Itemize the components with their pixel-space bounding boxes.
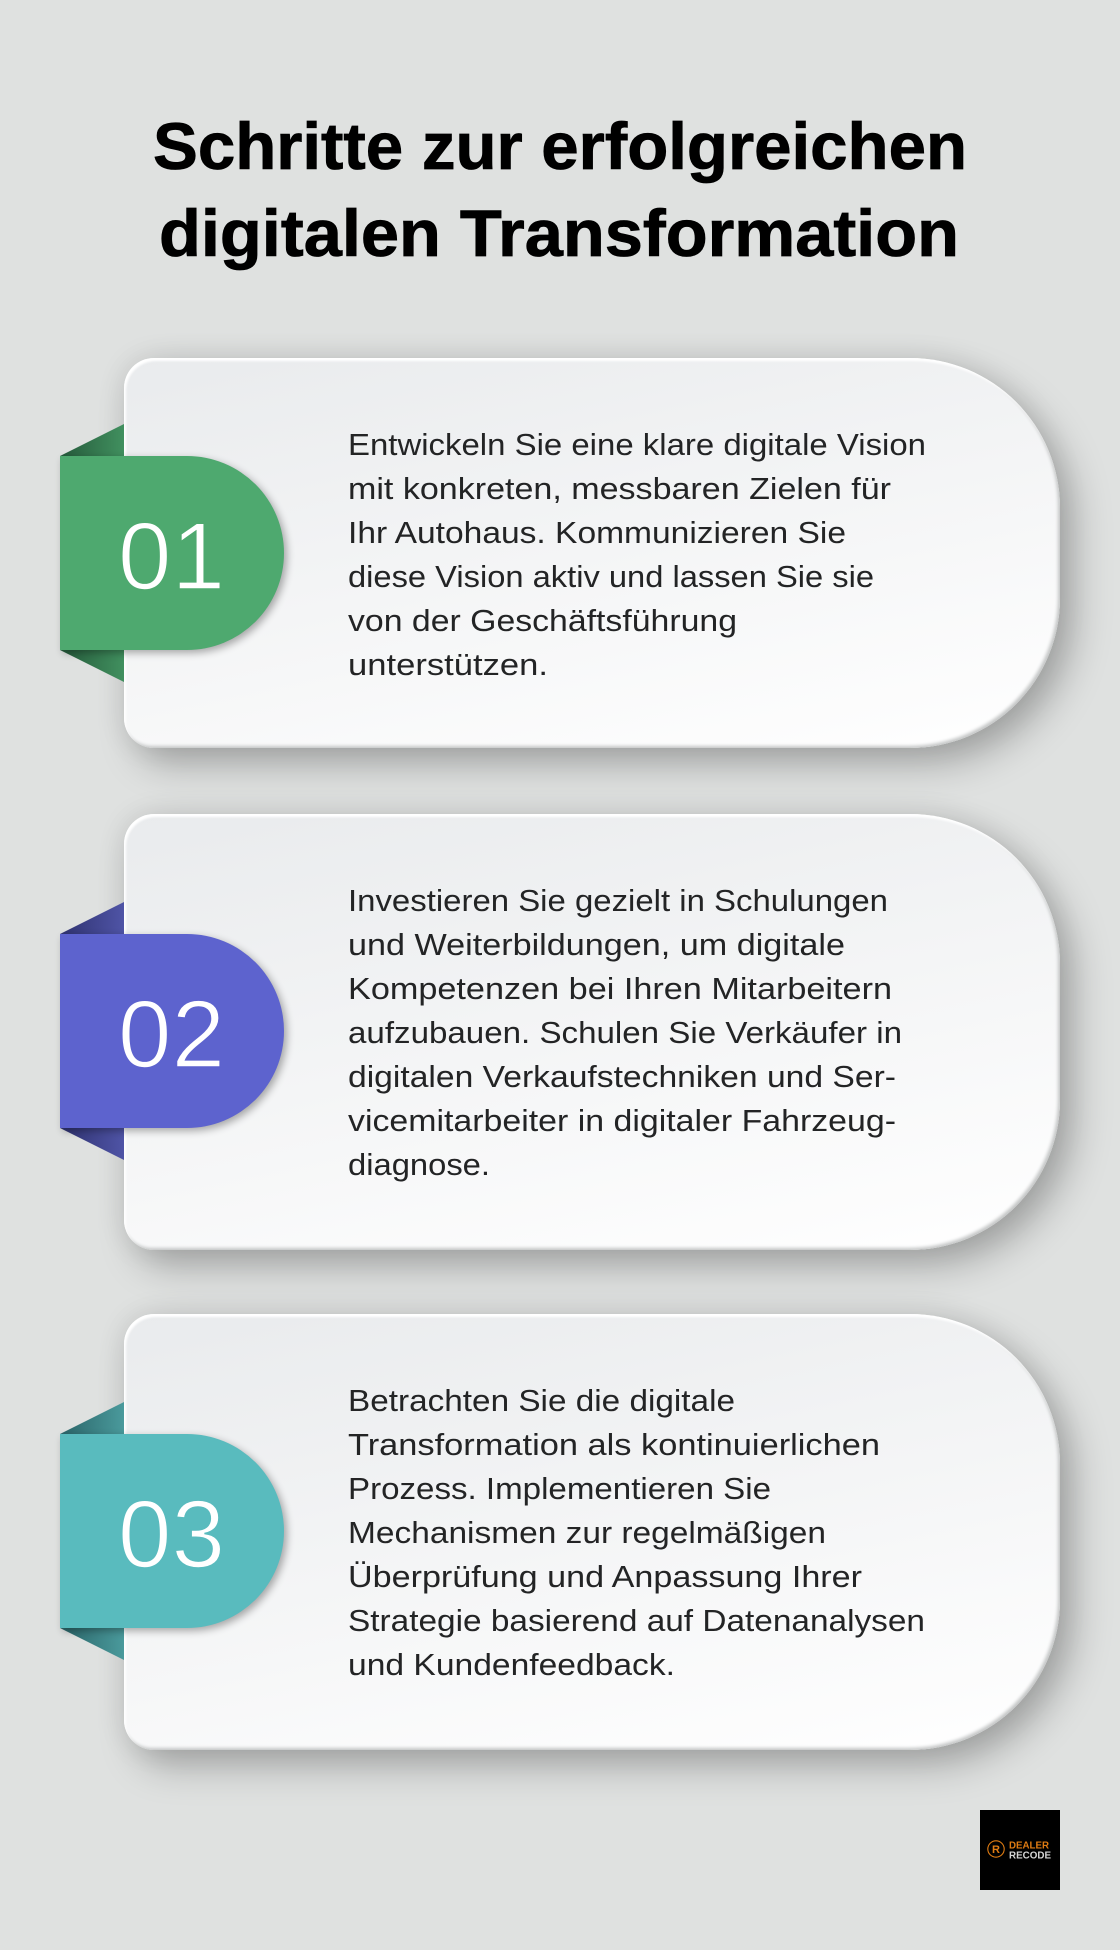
step 02 text: vicemitarbeiter in digitaler Fahrzeug-: [348, 1103, 896, 1138]
ribbon fold bottom: [60, 1628, 124, 1660]
panel: step 03: [58, 1302, 1093, 1785]
step 03 text: Betrachten Sie die digitale: [348, 1383, 735, 1418]
step 03 text: Strategie basierend auf Datenanalysen: [348, 1603, 925, 1638]
number badge 03: 03: [118, 1481, 225, 1588]
title: Schritte zur erfolgreichen: [153, 109, 967, 183]
step 01 text: diese Vision aktiv und lassen Sie sie: [348, 559, 874, 594]
step 01 text: unterstützen.: [348, 647, 548, 682]
number badge 01: 01: [118, 503, 225, 610]
step 02 text: [348, 883, 902, 1182]
step 02 text: und Weiterbildungen, um digitale: [348, 927, 845, 962]
panel: step 01: [58, 346, 1093, 783]
number badge 02: [60, 934, 284, 1128]
number badge 03: [60, 1434, 284, 1628]
number badge 01: [60, 456, 284, 650]
title: [153, 109, 967, 270]
step 01 text: Entwickeln Sie eine klare digitale Vision: [348, 427, 926, 462]
step 01 text: mit konkreten, messbaren Zielen für: [348, 471, 891, 506]
logo: Dealer Recode: R: [992, 1844, 1000, 1856]
logo: Dealer Recode: DEALER: [1009, 1840, 1049, 1852]
step 03 text: Überprüfung und Anpassung Ihrer: [348, 1559, 862, 1594]
step 02 text: Investieren Sie gezielt in Schulungen: [348, 883, 888, 918]
card background: [124, 814, 1060, 1250]
card background: [124, 1314, 1060, 1750]
logo: Dealer Recode: RECODE: [1009, 1850, 1051, 1862]
card background: [124, 358, 1060, 748]
step 03 text: und Kundenfeedback.: [348, 1647, 675, 1682]
ribbon fold bottom: [60, 1128, 124, 1160]
panel: step 02: [58, 802, 1093, 1285]
step 03 text: [348, 1383, 925, 1682]
title: digitalen Transformation: [159, 196, 959, 270]
ribbon fold top: [60, 1402, 124, 1434]
ribbon fold top: [60, 902, 124, 934]
step 02 text: diagnose.: [348, 1147, 490, 1182]
ribbon fold bottom: [60, 650, 124, 682]
step 01 text: von der Geschäftsführung: [348, 603, 737, 638]
step 03 text: Transformation als kontinuierlichen: [348, 1427, 880, 1462]
step 03 text: Mechanismen zur regelmäßigen: [348, 1515, 826, 1550]
ribbon fold top: [60, 424, 124, 456]
step 03 text: Prozess. Implementieren Sie: [348, 1471, 771, 1506]
step 02 text: digitalen Verkaufstechniken und Ser-: [348, 1059, 896, 1094]
step 01 text: Ihr Autohaus. Kommunizieren Sie: [348, 515, 846, 550]
step 01 text: [348, 427, 926, 682]
step 02 text: aufzubauen. Schulen Sie Verkäufer in: [348, 1015, 902, 1050]
step 02 text: Kompetenzen bei Ihren Mitarbeitern: [348, 971, 892, 1006]
number badge 02: 02: [118, 981, 225, 1088]
logo: Dealer Recode: [980, 1810, 1060, 1890]
